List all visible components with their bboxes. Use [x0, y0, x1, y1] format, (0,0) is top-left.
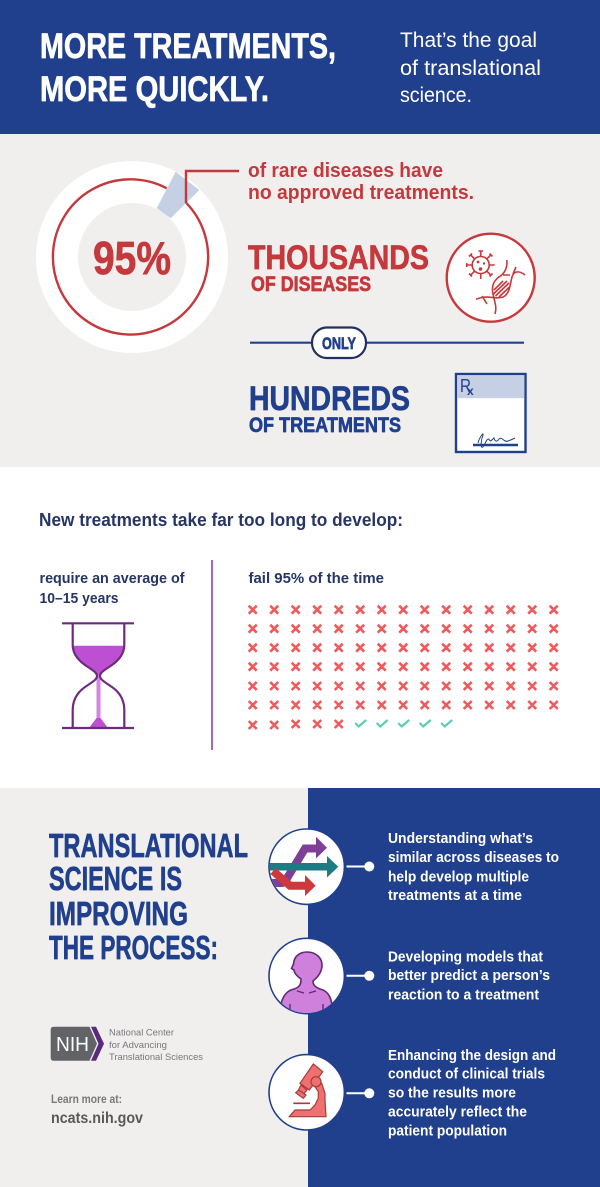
icon: prescription pad: R: [460, 376, 471, 396]
text: models: [388, 949, 550, 1003]
chart: 95 percent donut: [36, 161, 239, 353]
logo: NIH NCATS: National Center: [109, 1028, 174, 1038]
text: average years: [40, 570, 185, 607]
text: understanding: [388, 830, 559, 904]
logo: NIH NCATS: NIH: [56, 1034, 89, 1056]
logo: NIH NCATS: [51, 1027, 203, 1063]
icon: person: [269, 938, 344, 1020]
icon: crossing arrows: [269, 829, 344, 904]
text: clinical trials: patient population: [388, 1123, 507, 1140]
icon: microscope: [269, 1055, 344, 1130]
text: understanding: Understanding what’s: [388, 830, 533, 847]
text: clinical trials: Enhancing the design and: [388, 1047, 556, 1064]
text: understanding: help develop multiple: [388, 868, 529, 886]
callout: rare diseases: [248, 160, 474, 204]
callout: rare diseases: no approved treatments.: [248, 182, 474, 204]
subtitle: science.: [400, 84, 472, 107]
text: learn more: [51, 1092, 143, 1127]
icon: hourglass: [62, 623, 134, 728]
panel: translational science: [0, 788, 600, 1187]
heading: translational science: THE PROCESS:: [49, 930, 218, 967]
logo: NIH NCATS: for Advancing: [109, 1040, 167, 1051]
subtitle: [400, 29, 541, 107]
title: [40, 27, 336, 109]
heading: translational science: IMPROVING: [49, 896, 188, 933]
divider: only: ONLY: [322, 335, 356, 353]
panel: development time and failure: [0, 467, 600, 788]
text: failure rate: fail 95% of the time: [248, 570, 384, 587]
subtitle: of translational: [400, 57, 541, 80]
title: MORE QUICKLY.: [40, 70, 269, 109]
subtitle: That’s the goal: [400, 29, 537, 52]
connector: arrows: [346, 862, 374, 872]
callout: rare diseases: of rare diseases have: [248, 160, 443, 182]
heading: translational science: SCIENCE IS: [49, 861, 182, 898]
text: learn more: ncats.nih.gov: [51, 1110, 143, 1127]
title: MORE TREATMENTS,: [40, 27, 336, 66]
icon: virus and DNA: [447, 234, 535, 322]
heading: hundreds of treatments: HUNDREDS: [249, 380, 410, 418]
text: clinical trials: accurately reflect the: [388, 1104, 527, 1121]
chart: 95 crosses and 5 checks: [249, 606, 558, 729]
icon: prescription pad: [456, 374, 526, 452]
heading: translational science: TRANSLATIONAL: [49, 828, 248, 865]
text: average years: require an average of: [40, 570, 185, 587]
text: clinical trials: conduct of clinical trials: [388, 1066, 545, 1082]
panel: header: [0, 0, 600, 134]
heading: hundreds of treatments: OF TREATMENTS: [249, 414, 401, 437]
text: models: Developing models that: [388, 949, 543, 966]
text: understanding: similar across diseases to: [388, 849, 559, 866]
text: clinical trials: [388, 1047, 556, 1140]
text: clinical trials: so the results more: [388, 1085, 516, 1102]
heading: development: New treatments take far too long to develop:: [39, 510, 403, 530]
heading: thousands of diseases: [248, 239, 429, 296]
heading: hundreds of treatments: [249, 380, 410, 437]
connector: person: [346, 971, 374, 981]
icon: prescription pad: x: [467, 384, 474, 398]
divider: [211, 560, 213, 750]
text: models: better predict a person’s: [388, 967, 550, 984]
text: models: reaction to a treatment: [388, 986, 539, 1003]
connector: microscope: [346, 1088, 374, 1098]
chart: 95 percent donut: 95%: [93, 232, 171, 284]
heading: thousands of diseases: OF DISEASES: [251, 272, 371, 296]
text: understanding: treatments at a time: [388, 887, 522, 904]
text: learn more: Learn more at:: [51, 1092, 122, 1106]
heading: thousands of diseases: THOUSANDS: [248, 239, 429, 277]
panel: rare disease statistics: [0, 134, 600, 467]
logo: NIH NCATS: Translational Sciences: [109, 1052, 203, 1063]
divider: only: [250, 328, 524, 358]
text: average years: 10–15 years: [40, 590, 118, 607]
heading: translational science: [49, 828, 248, 967]
